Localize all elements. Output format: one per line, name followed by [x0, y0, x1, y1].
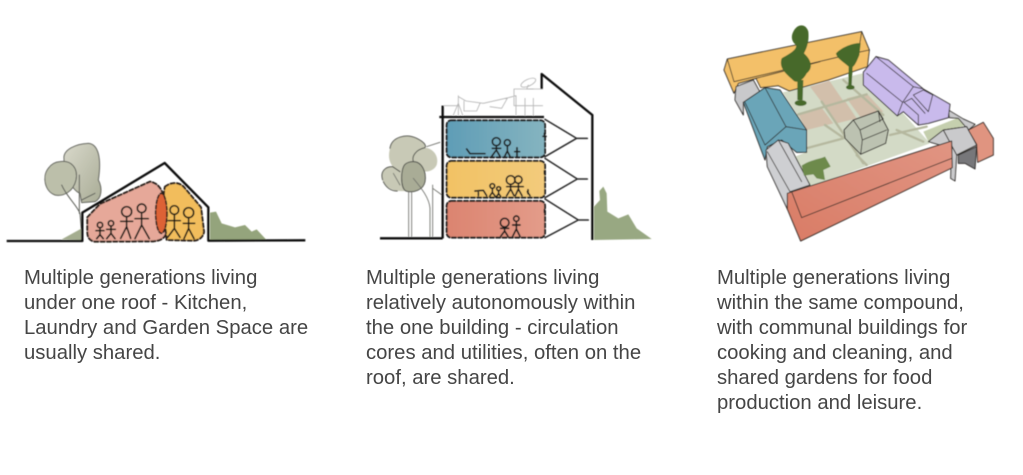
- caption: within one building: [366, 267, 641, 389]
- building: orange north: [724, 32, 869, 93]
- roof clothes line and dish: [444, 76, 543, 117]
- caption: under one roof: under one roof - Kitchen,: [24, 292, 247, 314]
- caption: within same compound: production and leisure.: [717, 392, 922, 414]
- caption: within same compound: [717, 267, 967, 414]
- house outline and ground: [7, 163, 305, 241]
- building: small red east: [968, 122, 993, 162]
- pink living zone: [87, 182, 166, 242]
- courtyard paving: [783, 72, 967, 187]
- building: central grey pavilion: [844, 111, 888, 154]
- panel: single house section: [7, 143, 305, 242]
- caption: within same compound: within the same compound,: [717, 292, 964, 314]
- caption: within one building: the one building - circulation: [366, 317, 619, 339]
- caption: within same compound: cooking and cleaning, and: [717, 342, 953, 364]
- building: blue west: [743, 88, 807, 160]
- caption: within one building: Multiple generations living: [366, 267, 599, 289]
- building shell: [380, 74, 592, 240]
- orange living zone: [164, 183, 204, 241]
- icon: courtyard trees: [781, 25, 861, 180]
- caption: under one roof: [24, 267, 308, 364]
- caption: under one roof: usually shared.: [24, 342, 160, 364]
- caption: within same compound: Multiple generations living: [717, 267, 950, 289]
- panel: compound axonometric: [724, 25, 993, 241]
- stick figures: [467, 133, 546, 236]
- building: purple east: [863, 57, 950, 125]
- caption: within one building: cores and utilities, often on the: [366, 342, 641, 364]
- panel: apartment section: [380, 74, 652, 240]
- caption: within one building: roof, are shared.: [366, 367, 515, 389]
- caption: within same compound: with communal buildings for: [717, 317, 967, 339]
- building: grey south-west: [766, 140, 810, 209]
- floor: blue: [447, 120, 545, 157]
- floor: yellow: [447, 161, 545, 198]
- icon: shrub right of house: [210, 212, 266, 240]
- floor: red: [447, 201, 545, 238]
- caption: under one roof: Laundry and Garden Space are: [24, 317, 308, 339]
- caption: within one building: relatively autonomously within: [366, 292, 635, 314]
- caption: under one roof: Multiple generations living: [24, 267, 257, 289]
- icon: trees behind house: [45, 143, 101, 240]
- icon: shrub right of building: [594, 187, 652, 240]
- building: grey gatehouse: [928, 127, 977, 181]
- icon: trees left of building: [382, 136, 442, 237]
- shared overlap zone: [156, 193, 167, 233]
- building: grey link: [735, 80, 761, 115]
- building: grey east wing: [948, 110, 975, 130]
- stick figures: [96, 204, 195, 239]
- caption: within same compound: shared gardens for food: [717, 367, 932, 389]
- building: red south: [787, 141, 952, 241]
- circulation braces: [545, 119, 588, 238]
